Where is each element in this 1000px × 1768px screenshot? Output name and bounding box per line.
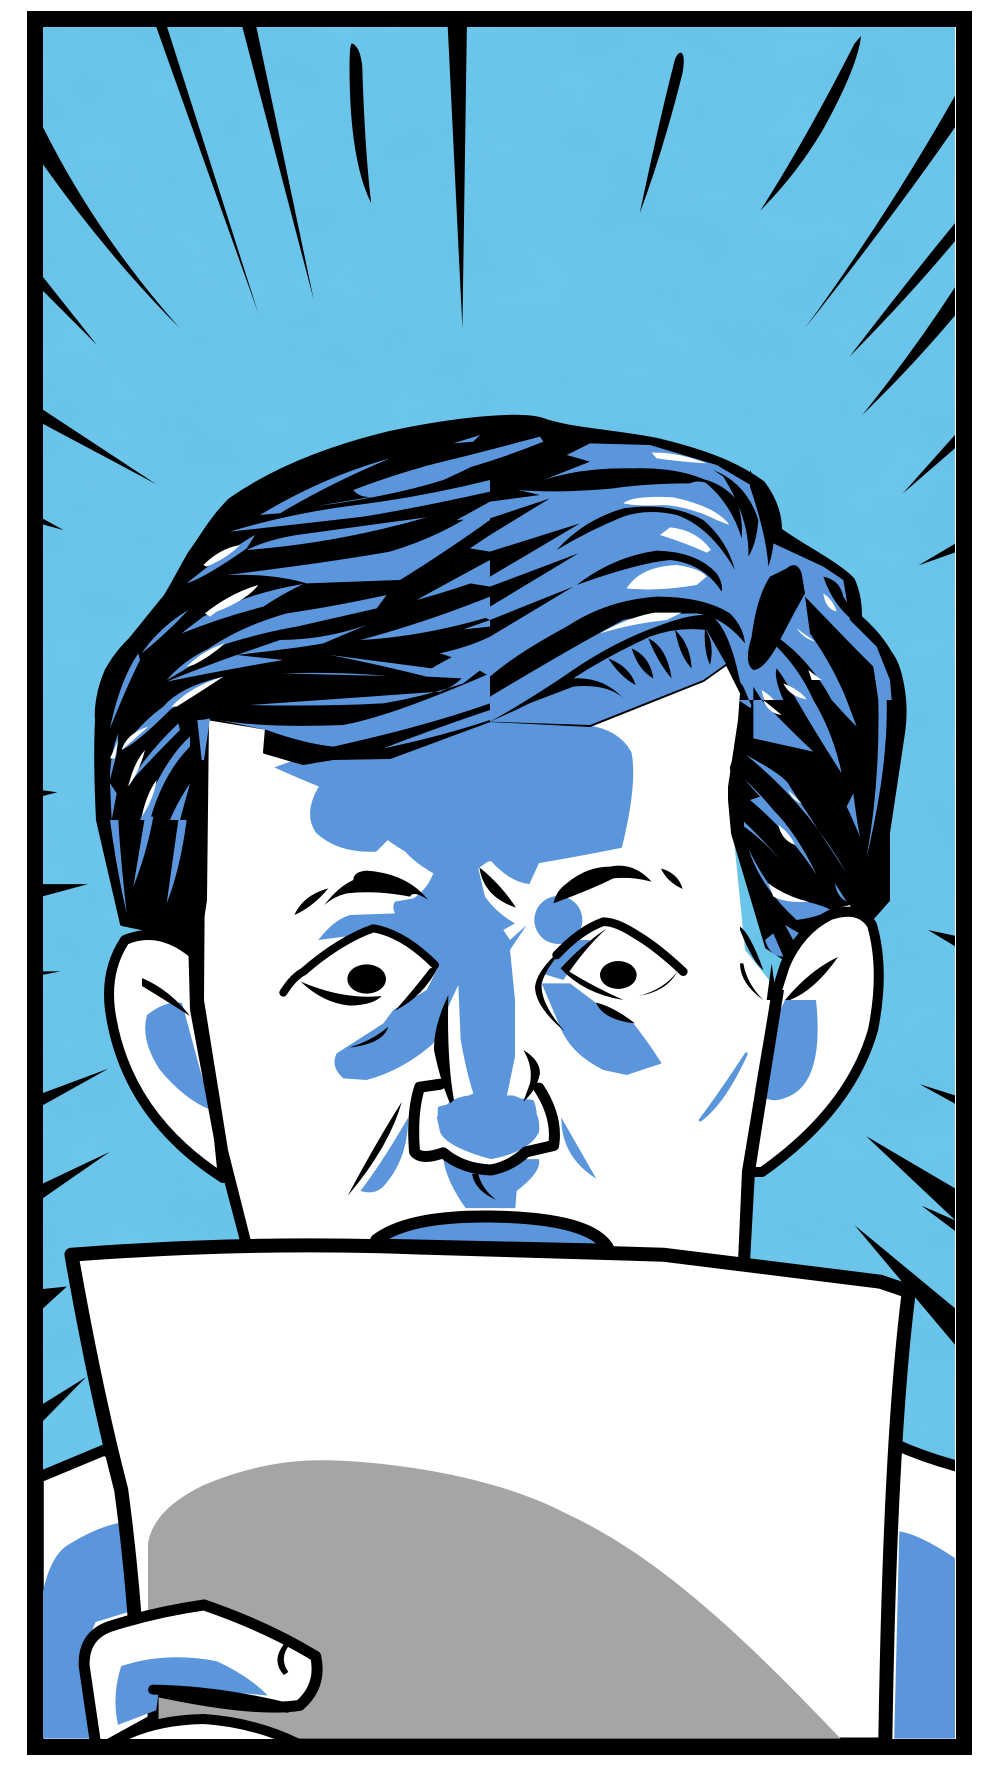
right shoulder shadow — [894, 1531, 955, 1739]
eyes and brows — [283, 866, 683, 1103]
burst rays bottom — [43, 1069, 955, 1421]
nose outline — [414, 1084, 554, 1170]
left shoulder shadow — [43, 1523, 128, 1739]
left ear outline — [109, 935, 223, 1178]
hair strands right — [423, 437, 892, 725]
philtrum line — [472, 1174, 496, 1200]
finger crease — [153, 1690, 287, 1708]
right eyebrow — [553, 866, 683, 903]
smile line — [348, 1102, 402, 1196]
left eyebrow — [294, 871, 428, 915]
right ear shadow — [755, 1000, 818, 1100]
shoulders — [38, 1443, 963, 1744]
blue strands left — [110, 435, 490, 913]
burst rays middle — [43, 410, 955, 975]
black strands right — [490, 468, 878, 722]
right eye — [535, 922, 683, 1032]
left eye — [283, 928, 438, 1011]
burst rays top — [43, 27, 955, 415]
right jaw line — [738, 990, 784, 1262]
white highlights right — [600, 453, 837, 715]
nose bridge lines — [434, 995, 540, 1103]
lower face shadows — [360, 1054, 746, 1208]
left ear crease — [142, 978, 190, 1016]
hair strands left — [110, 435, 490, 913]
paper — [71, 1245, 909, 1744]
under-eye marks — [350, 1003, 635, 1047]
gray shape on paper — [148, 1460, 841, 1739]
white highlights side — [763, 700, 852, 910]
left ear shadow — [145, 1002, 211, 1110]
white highlights left — [110, 545, 258, 817]
left ear — [109, 935, 223, 1178]
blue base right — [440, 443, 892, 725]
sideburn marks — [740, 927, 777, 1000]
thumb — [108, 1719, 300, 1744]
left jaw line — [188, 914, 250, 1240]
hand — [84, 1605, 317, 1744]
right ear crease — [785, 957, 838, 1000]
forehead shadow — [274, 722, 634, 884]
face — [190, 640, 777, 1262]
hair silhouette — [96, 417, 905, 985]
left shoulder — [43, 1444, 128, 1739]
central face shadow — [318, 847, 662, 1137]
right ear outline — [750, 912, 879, 1172]
hair side lower right — [730, 700, 887, 957]
top blue sliver — [424, 436, 544, 468]
right shoulder — [892, 1442, 955, 1739]
hand shadow — [115, 1657, 268, 1725]
fingers — [84, 1605, 317, 1744]
paper and hand — [71, 1245, 909, 1744]
frown mark — [479, 867, 516, 908]
nose and mouth — [348, 1084, 609, 1250]
right ear — [750, 912, 879, 1172]
mouth — [376, 1216, 609, 1250]
black mass — [730, 700, 782, 773]
fingernail — [277, 1644, 288, 1675]
blue strands side — [743, 700, 887, 957]
